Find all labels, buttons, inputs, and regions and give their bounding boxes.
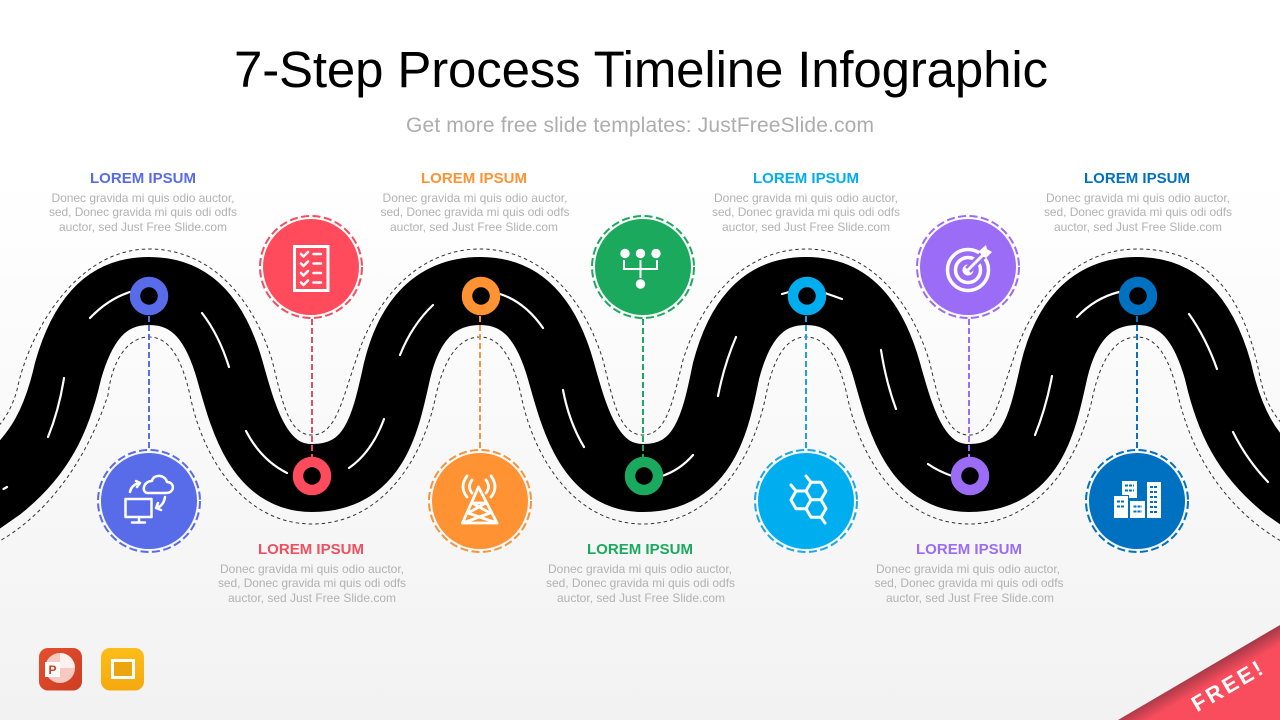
step 4 road marker	[630, 462, 658, 490]
road lane markings	[4, 292, 1268, 489]
icon: radio tower	[462, 476, 497, 523]
step 2 disc	[263, 219, 359, 315]
step 5	[712, 170, 900, 552]
step 2 description: auctor, sed Just Free Slide.com	[228, 591, 396, 605]
step 3 label: LOREM IPSUM	[421, 170, 527, 187]
step 6 description: auctor, sed Just Free Slide.com	[886, 591, 1054, 605]
step 3 description: Donec gravida mi quis odio auctor,	[382, 191, 568, 205]
step 1 ring	[98, 450, 200, 552]
step 5 disc	[758, 453, 854, 549]
step 5 road marker	[793, 282, 821, 310]
icon: monitor and cloud sync	[126, 476, 173, 522]
step 6 description: Donec gravida mi quis odio auctor,	[876, 562, 1060, 576]
step 4	[546, 216, 735, 605]
step 7 disc	[1089, 453, 1185, 549]
step 3	[380, 170, 570, 552]
step 7 description	[1044, 191, 1232, 234]
step 3 connector	[479, 316, 481, 450]
title: 7-Step Process Timeline Infographic	[234, 41, 1048, 98]
step 6 description: sed, Donec gravida mi quis odi odfs	[874, 576, 1064, 590]
icon: PowerPoint: P	[48, 663, 57, 677]
icon: city buildings	[1114, 481, 1161, 518]
step 5 description: auctor, sed Just Free Slide.com	[722, 220, 890, 234]
icon: hierarchy tree	[620, 249, 661, 289]
subtitle: Get more free slide templates: JustFreeSlide.com	[406, 114, 874, 137]
step 1 description	[49, 191, 237, 234]
road upper dashed border	[0, 249, 1280, 435]
step 4 description	[546, 562, 735, 605]
step 6 description	[874, 562, 1064, 605]
step 1 road marker	[135, 282, 163, 310]
step 7 description: auctor, sed Just Free Slide.com	[1054, 220, 1222, 234]
step 4 disc	[595, 219, 691, 315]
icon: PowerPoint	[39, 648, 82, 690]
step 7 description: Donec gravida mi quis odio auctor,	[1046, 191, 1230, 205]
step 4 description: auctor, sed Just Free Slide.com	[557, 591, 725, 605]
step 4 connector	[642, 319, 644, 460]
step 4 ring	[592, 216, 694, 318]
step 3 ring	[429, 450, 531, 552]
step 6 ring	[917, 216, 1019, 318]
step 1 label: LOREM IPSUM	[90, 170, 196, 187]
step 4 label: LOREM IPSUM	[587, 541, 693, 558]
step 3 description	[380, 191, 570, 234]
step 5 description	[712, 191, 900, 234]
step 5 description: Donec gravida mi quis odio auctor,	[714, 191, 898, 205]
icon: target with arrow	[948, 245, 992, 290]
step 2 road marker	[298, 462, 326, 490]
step 4 description: Donec gravida mi quis odio auctor,	[548, 562, 732, 576]
step 2 description: Donec gravida mi quis odio auctor,	[220, 562, 404, 576]
banner triangle	[1118, 625, 1280, 720]
winding road	[0, 249, 1280, 546]
step 2	[218, 216, 406, 605]
step 7 description: sed, Donec gravida mi quis odi odfs	[1044, 205, 1232, 219]
step 6 label: LOREM IPSUM	[916, 541, 1022, 558]
step 3 description: auctor, sed Just Free Slide.com	[390, 220, 558, 234]
icon: molecule hexagons	[791, 476, 826, 523]
step 1 disc	[101, 453, 197, 549]
step 1 connector	[148, 316, 150, 450]
step 7 connector	[1136, 316, 1138, 450]
step 2 ring	[260, 216, 362, 318]
step 5 ring	[755, 450, 857, 552]
step 3 road marker	[467, 282, 495, 310]
road lower dashed border	[0, 337, 1280, 546]
step 6	[874, 216, 1064, 605]
step 2 connector	[311, 319, 313, 460]
step 7 ring	[1086, 450, 1188, 552]
step 6 connector	[968, 319, 970, 460]
step 6 road marker	[956, 462, 984, 490]
step 5 label: LOREM IPSUM	[753, 170, 859, 187]
step 5 description: sed, Donec gravida mi quis odi odfs	[712, 205, 900, 219]
icon: checklist	[294, 246, 328, 290]
step 1 description: sed, Donec gravida mi quis odi odfs	[49, 205, 237, 219]
step 2 label: LOREM IPSUM	[258, 541, 364, 558]
banner text: FREE!	[1187, 654, 1270, 717]
step 3 disc	[432, 453, 528, 549]
free corner banner	[1118, 625, 1280, 720]
step 5 connector	[805, 316, 807, 450]
icon: Google Slides	[101, 648, 144, 690]
step 7	[1044, 170, 1232, 552]
step 1 description: auctor, sed Just Free Slide.com	[59, 220, 227, 234]
step 2 description	[218, 562, 406, 605]
step 6 disc	[920, 219, 1016, 315]
step 1 description: Donec gravida mi quis odio auctor,	[52, 191, 234, 205]
step 7 road marker	[1124, 282, 1152, 310]
road surface	[0, 291, 1280, 515]
step 4 description: sed, Donec gravida mi quis odi odfs	[546, 576, 735, 590]
step 1	[49, 170, 237, 552]
step 7 label: LOREM IPSUM	[1084, 170, 1190, 187]
step 2 description: sed, Donec gravida mi quis odi odfs	[218, 576, 406, 590]
step 3 description: sed, Donec gravida mi quis odi odfs	[380, 205, 570, 219]
